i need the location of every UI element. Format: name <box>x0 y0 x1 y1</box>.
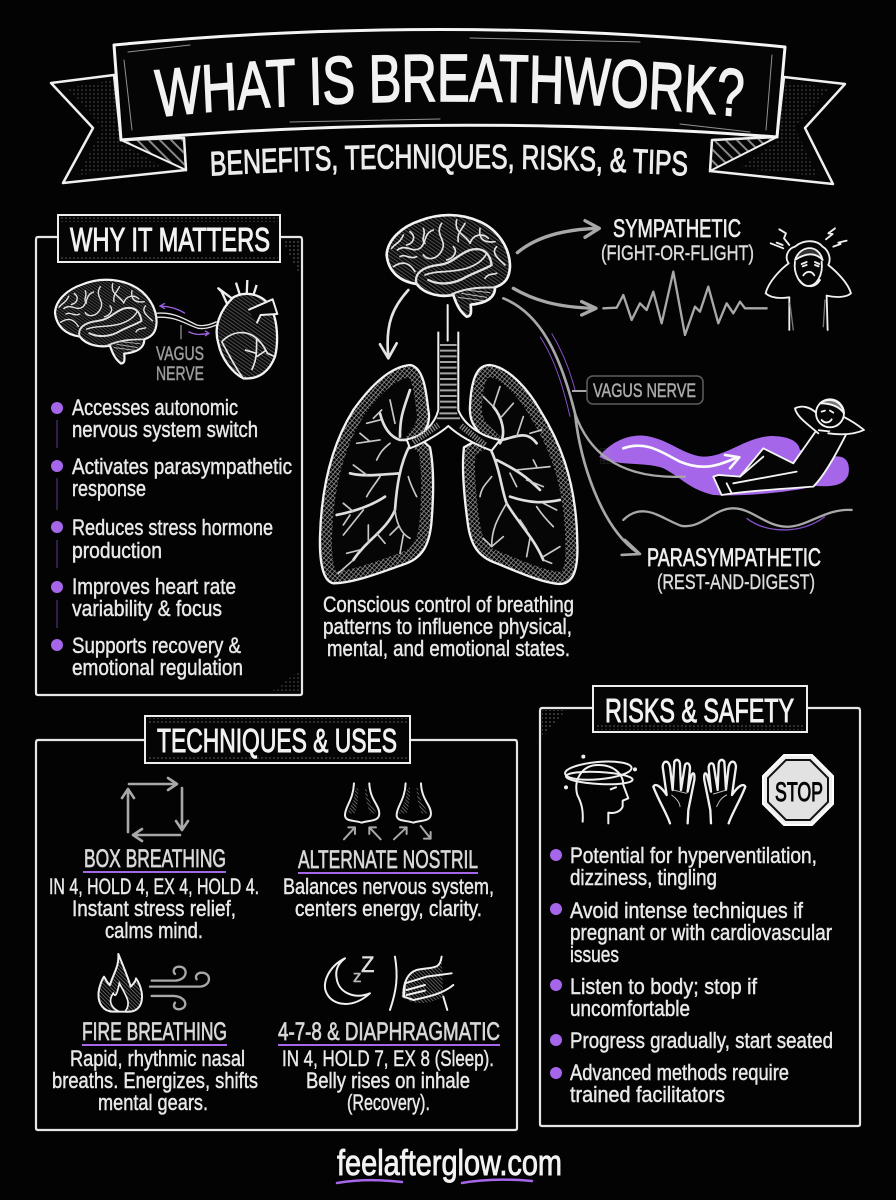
bullet list: why it matters: Reduces stress hormone <box>72 515 273 540</box>
heading: risks <box>593 686 807 732</box>
heading: risks: RISKS & SAFETY <box>605 692 794 729</box>
technique: box breathing: calms mind. <box>105 918 203 943</box>
heading: parasympathetic: PARASYMPATHETIC <box>647 544 821 572</box>
panel: risks and safety <box>540 686 860 1126</box>
banner body <box>114 29 785 140</box>
subtitle: BENEFITS, TECHNIQUES, RISKS, & TIPS <box>211 144 688 176</box>
bullet list: risks <box>550 843 833 1107</box>
bullet list: risks: Advanced methods require <box>570 1060 789 1085</box>
center diagram: brain and lungs <box>320 215 577 661</box>
banner right tail <box>710 77 845 184</box>
definition text <box>323 592 574 661</box>
technique: alternate nostril: ALTERNATE NOSTRIL <box>298 846 478 874</box>
icon: stressed person <box>766 228 851 330</box>
bullet list: why it matters: Supports recovery & <box>72 633 241 658</box>
label: vagus nerve: VAGUS <box>156 344 204 365</box>
label: vagus nerve <box>156 344 204 385</box>
chart: pulse line <box>603 272 767 335</box>
bullet list: risks: dizziness, tingling <box>570 865 717 890</box>
icon: brain large <box>387 215 510 317</box>
icon: vagus nerve link <box>155 303 217 339</box>
icon: box arrows <box>122 778 188 841</box>
bullet list: why it matters: Accesses autonomic <box>72 395 238 420</box>
technique: fire breathing <box>52 954 258 1115</box>
title banner <box>50 28 846 186</box>
heading: sympathetic: (FIGHT-OR-FLIGHT) <box>601 242 754 265</box>
icon: flame and wind <box>98 954 209 1012</box>
left lung <box>320 365 433 583</box>
wave line <box>623 508 852 530</box>
technique: box breathing <box>49 778 259 943</box>
heading: techniques <box>145 716 410 763</box>
bullet list: why it matters: nervous system switch <box>72 417 258 442</box>
label: vagus nerve pill <box>572 376 703 404</box>
trachea and bronchi <box>407 305 500 451</box>
bullet list: risks: Potential for hyperventilation, <box>570 843 817 868</box>
bullet list: risks: Listen to body; stop if <box>570 974 758 999</box>
icon: heart <box>217 280 277 378</box>
technique: 4-7-8 and diaphragmatic: IN 4, HOLD 7, EX 8 (Sleep). <box>282 1046 494 1071</box>
label: vagus nerve: NERVE <box>156 364 204 385</box>
bullet list: risks: issues <box>570 942 619 967</box>
icon: stop sign: STOP <box>775 777 823 807</box>
arrow: breath in ribbon <box>623 446 739 468</box>
definition text: patterns to influence physical, <box>323 614 572 639</box>
bullet list: risks: Avoid intense techniques if <box>570 898 804 923</box>
main title <box>154 54 744 117</box>
technique: fire breathing: mental gears. <box>98 1090 208 1115</box>
heading: parasympathetic: (REST-AND-DIGEST) <box>657 571 815 594</box>
purple ribbon <box>599 435 849 495</box>
heading: sympathetic: SYMPATHETIC <box>613 215 741 243</box>
bullet list: why it matters: variability & focus <box>72 596 222 621</box>
technique: 4-7-8 and diaphragmatic <box>278 952 500 1115</box>
heading: parasympathetic <box>647 544 821 594</box>
arrow: brain to lungs <box>380 290 408 358</box>
arrow: vagus to parasympathetic <box>503 298 685 555</box>
icon: noses <box>344 783 431 839</box>
technique: fire breathing: FIRE BREATHING <box>82 1018 227 1046</box>
panel: techniques and uses <box>36 716 517 1130</box>
icon: stop sign <box>763 755 833 825</box>
footer url: feelafterglow.com <box>337 1142 562 1183</box>
right lung <box>463 365 577 584</box>
heading: why it matters <box>58 215 280 262</box>
technique: box breathing: IN 4, HOLD 4, EX 4, HOLD 4. <box>49 874 259 899</box>
icon: dizzy head <box>564 756 636 823</box>
icon: moon and belly: Z <box>361 952 374 977</box>
technique: fire breathing: breaths. Energizes, shifts <box>52 1068 258 1093</box>
panel: why it matters <box>36 215 302 695</box>
banner left tail <box>51 75 186 183</box>
icon: brain small <box>55 280 157 364</box>
icon: relaxed person <box>713 399 864 495</box>
bullet list: why it matters: response <box>72 476 146 501</box>
lungs illustration <box>320 305 577 584</box>
bullet list: risks: pregnant or with cardiovascular <box>570 920 832 945</box>
icon: moon and belly: z <box>353 967 362 986</box>
technique: fire breathing: Rapid, rhythmic nasal <box>70 1046 245 1071</box>
icon: tingling hands <box>653 760 745 823</box>
technique: alternate nostril: Balances nervous system, <box>283 874 494 899</box>
definition text: Conscious control of breathing <box>323 592 574 617</box>
heading: techniques: TECHNIQUES & USES <box>157 722 397 759</box>
nervous system pathways <box>503 215 864 594</box>
bullet list: why it matters <box>51 395 292 680</box>
heading: why it matters: WHY IT MATTERS <box>70 221 270 258</box>
technique: box breathing: BOX BREATHING <box>84 845 226 873</box>
bullet list: why it matters: production <box>72 538 162 563</box>
bullet list: why it matters: Activates parasympathetic <box>72 454 292 479</box>
label: vagus nerve pill: VAGUS NERVE <box>593 381 696 402</box>
definition text: mental, and emotional states. <box>327 636 570 661</box>
bullet list: risks: trained facilitators <box>570 1082 725 1107</box>
bullet list: risks: Progress gradually, start seated <box>570 1028 833 1053</box>
technique: alternate nostril <box>283 783 494 921</box>
arrow: to sympathetic <box>517 221 599 253</box>
bullet list: why it matters: emotional regulation <box>72 655 243 680</box>
bullet list: risks: uncomfortable <box>570 996 690 1021</box>
technique: box breathing: Instant stress relief, <box>72 896 236 921</box>
heading: sympathetic <box>601 215 754 265</box>
technique: alternate nostril: centers energy, clarity. <box>295 896 482 921</box>
bullet list: why it matters: Improves heart rate <box>72 574 236 599</box>
arrow: to pulse line <box>513 288 596 315</box>
technique: 4-7-8 and diaphragmatic: 4-7-8 & DIAPHRAGMATIC <box>278 1018 500 1046</box>
main title: WHAT IS BREATHWORK? <box>154 54 744 117</box>
technique: 4-7-8 and diaphragmatic: Belly rises on inhale <box>306 1068 470 1093</box>
icon: moon and belly <box>325 952 453 1010</box>
purple accent lines <box>540 333 575 417</box>
technique: 4-7-8 and diaphragmatic: (Recovery). <box>347 1090 430 1115</box>
